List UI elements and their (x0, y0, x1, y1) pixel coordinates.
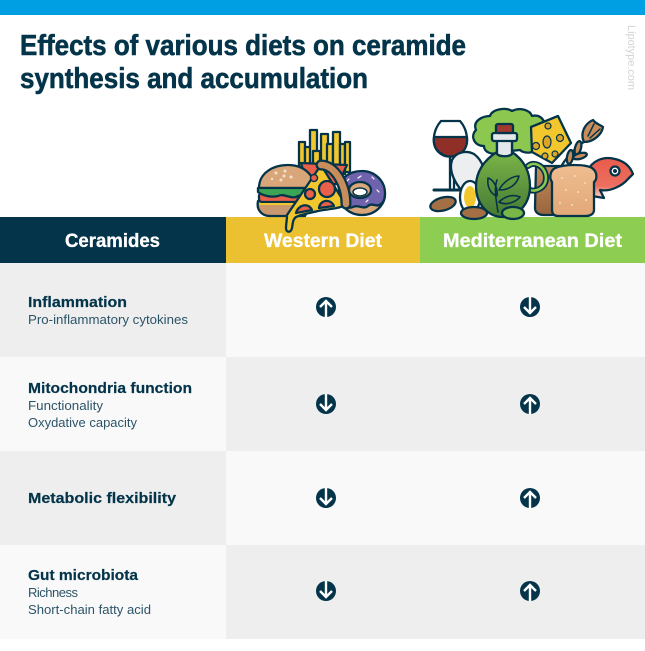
table header: Ceramides: Ceramides (65, 231, 160, 252)
icon: burger (258, 165, 315, 216)
table header: Ceramides (0, 217, 226, 263)
icon: french fries (299, 130, 350, 184)
row: Gut microbiota (0, 545, 645, 639)
icon: cheese (531, 116, 571, 163)
row: Inflammation: Pro-inflammatory cytokines (28, 312, 188, 327)
watermark: Lipotype.com (625, 25, 637, 90)
row: Mitochondria function: Functionality (28, 398, 104, 413)
icon: olive oil bottle (476, 124, 546, 219)
icon: western food illustration (258, 130, 385, 232)
row: Mitochondria function (0, 357, 645, 451)
row: Metabolic flexibility (0, 451, 645, 545)
icon: broccoli (473, 109, 549, 154)
title: synthesis and accumulation (20, 63, 368, 95)
icon: fish (586, 158, 633, 198)
icon: bread (535, 165, 596, 216)
title (20, 30, 466, 95)
table header: Mediterranean Diet: Mediterranean Diet (443, 231, 623, 252)
icon: wine glass (434, 121, 467, 190)
row: Gut microbiota: Short-chain fatty acid (28, 602, 151, 617)
row: Gut microbiota: Richness (28, 585, 78, 600)
row: Metabolic flexibility: Metabolic flexibility (28, 490, 177, 507)
top bar (0, 0, 645, 15)
icon: wheat (562, 120, 603, 165)
row: Gut microbiota: Gut microbiota (28, 567, 139, 584)
icon: egg (451, 152, 485, 213)
row: Inflammation: Inflammation (28, 294, 127, 311)
row: Mitochondria function: Oxydative capacity (28, 415, 137, 430)
table header: Western Diet: Western Diet (264, 231, 383, 252)
icon: donut (339, 171, 385, 215)
icon: pizza slice (286, 165, 346, 232)
row: Inflammation (0, 263, 645, 357)
icon: Mediterranean food illustration (429, 109, 633, 219)
table header: Western Diet (226, 217, 420, 263)
title: Effects of various diets on ceramide (20, 30, 466, 62)
icon: almonds (429, 194, 487, 219)
table header: Mediterranean Diet (420, 217, 645, 263)
row: Mitochondria function: Mitochondria function (28, 380, 192, 397)
